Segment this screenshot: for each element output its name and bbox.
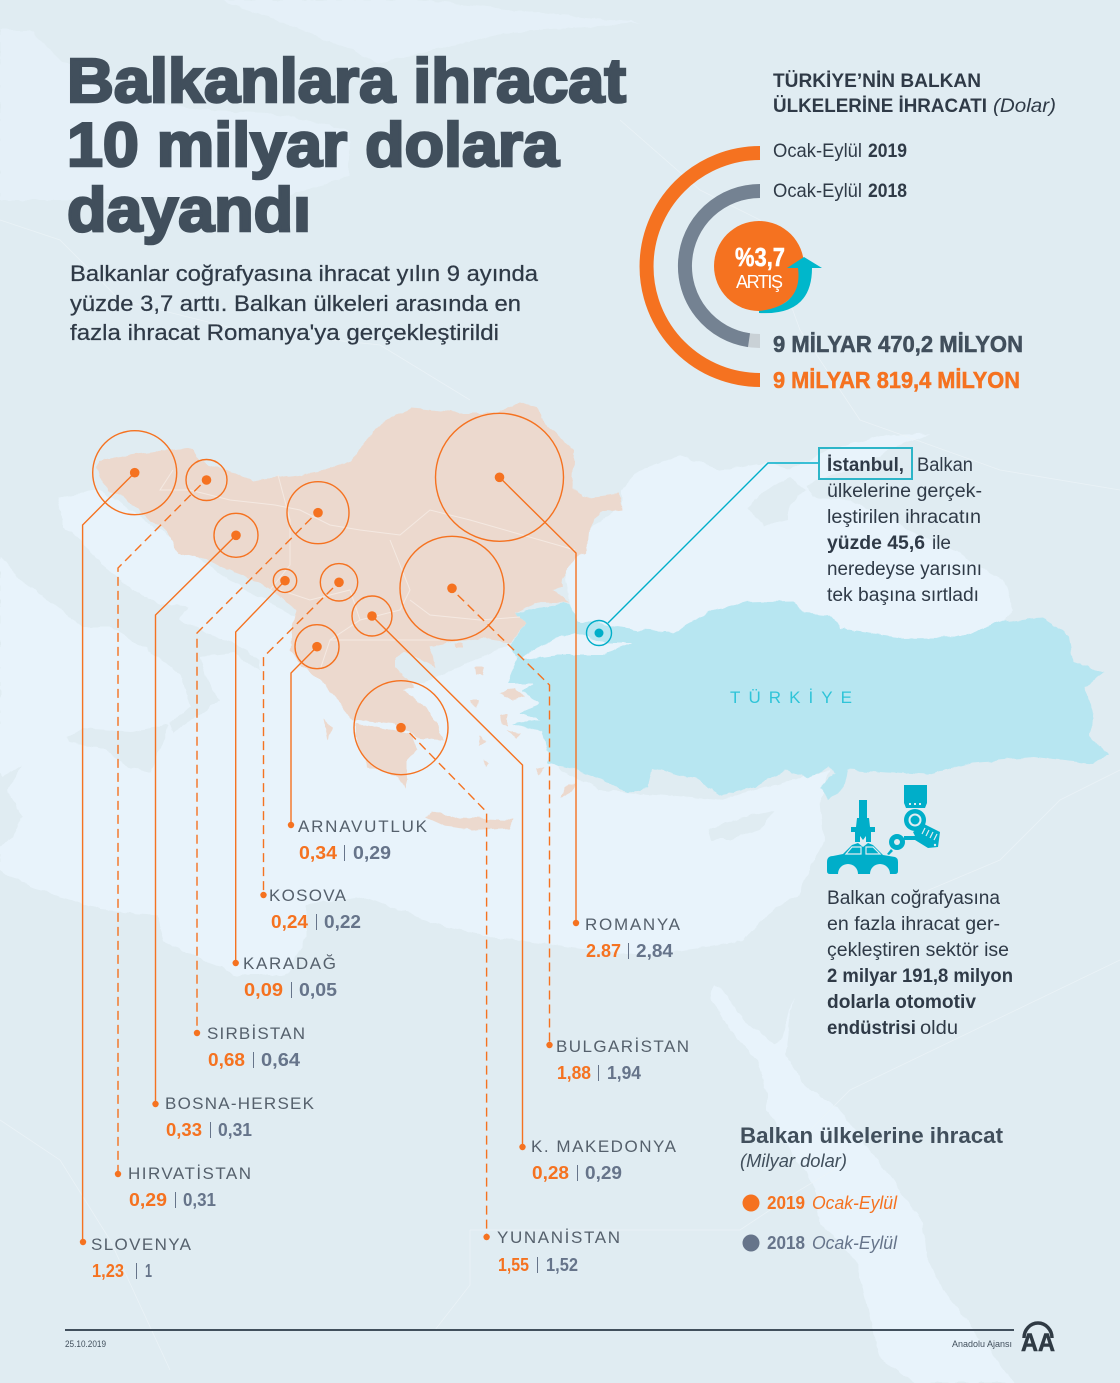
country: Romanya: ROMANYA	[585, 915, 681, 934]
badge: 3.7 percent increase: ARTIŞ	[736, 272, 783, 292]
country: Sırbistan: 0,68	[208, 1050, 245, 1070]
title: Balkanlara ihracat	[67, 47, 626, 116]
legend	[740, 1123, 1004, 1253]
text: automotive sector	[827, 888, 1013, 1039]
callout text: ile	[932, 533, 951, 554]
callout text: İstanbul,	[827, 455, 904, 476]
country: Arnavutluk: 0,29	[353, 843, 391, 863]
intro text: Balkanlar coğrafyasına ihracat yılın 9 ayında	[70, 261, 539, 286]
country: Karadağ: 0,09	[244, 980, 283, 1000]
country: Karadağ: KARADAĞ	[243, 954, 336, 973]
country: Yunanistan	[354, 681, 620, 1275]
country: Kuzey Makedonya	[352, 596, 677, 1183]
country: Romanya: 2.87	[586, 941, 621, 961]
callout text: neredeyse yarısını	[827, 559, 982, 580]
value: 2019 total: 9 MİLYAR 819,4 MİLYON	[773, 367, 1020, 393]
callout text	[827, 455, 982, 606]
country: Slovenya: SLOVENYA	[91, 1235, 192, 1254]
badge: 3.7 percent increase	[714, 221, 804, 311]
label: 2018 period	[773, 181, 907, 202]
callout text: tek başına sırtladı	[827, 585, 979, 606]
value: 2018 total: 9 MİLYAR 470,2 MİLYON	[773, 331, 1023, 357]
legend item: 2019: 2019	[767, 1193, 805, 1213]
country: Yunanistan: 1,55	[498, 1255, 529, 1275]
title: dayandı	[67, 176, 311, 245]
country: Kosova: 0,22	[324, 912, 361, 932]
title: 10 milyar dolara	[67, 111, 560, 180]
country: Kosova	[260, 564, 361, 932]
leader line	[608, 463, 819, 623]
country: Slovenya	[80, 431, 192, 1281]
country: Arnavutluk: ARNAVUTLUK	[298, 817, 428, 836]
country: Yunanistan: YUNANİSTAN	[497, 1228, 620, 1247]
map: Türkiye	[507, 602, 1109, 800]
intro text: yüzde 3,7 arttı. Balkan ülkeleri arasında en	[70, 291, 521, 316]
country: Hırvatistan: 0,31	[183, 1190, 216, 1210]
text: automotive sector: endüstrisi	[827, 1018, 916, 1039]
text: automotive sector: 2 milyar 191,8 milyon	[827, 966, 1013, 987]
highlight box	[819, 448, 912, 479]
text: automotive sector: çekleştiren sektör ise	[827, 940, 1009, 961]
callout text: yüzde 45,6	[827, 533, 925, 554]
country: Romanya	[436, 413, 681, 961]
date: 25.10.2019	[65, 1339, 106, 1350]
panel: Türkiye export arcs	[647, 71, 1056, 393]
İstanbul marker	[586, 620, 612, 646]
intro text: fazla ihracat Romanya'ya gerçekleştirildi	[70, 320, 499, 345]
legend item: 2019	[742, 1193, 898, 1213]
country: Hırvatistan: 0,29	[129, 1190, 167, 1210]
country: Hırvatistan: HIRVATİSTAN	[128, 1164, 251, 1183]
callout text: Balkan	[917, 455, 973, 476]
panel heading: ÜLKELERİNE İHRACATI	[773, 96, 987, 117]
country: Kosova: 0,24	[271, 912, 308, 932]
country: Romanya: 2,84	[636, 941, 673, 961]
source: Anadolu Ajansı	[952, 1339, 1012, 1350]
country: Kuzey Makedonya: 0,28	[532, 1163, 569, 1183]
country: Bosna-Hersek: 0,31	[218, 1120, 252, 1140]
footer	[65, 1323, 1055, 1357]
legend unit: (Milyar dolar)	[740, 1151, 847, 1171]
panel heading: (Dolar)	[993, 96, 1056, 117]
legend item: 2018: Ocak-Eylül	[812, 1233, 898, 1253]
callout: İstanbul	[586, 448, 982, 646]
legend item: 2018: 2018	[767, 1233, 805, 1253]
panel heading: TÜRKİYE’NİN BALKAN	[773, 71, 981, 92]
country: Bosna-Hersek	[152, 513, 315, 1140]
country: Sırbistan: 0,64	[261, 1050, 300, 1070]
country: Slovenya: 1	[145, 1261, 152, 1281]
country: Bosna-Hersek: 0,33	[166, 1120, 202, 1140]
legend item: 2018	[742, 1233, 898, 1253]
legend title: Balkan ülkelerine ihracat	[740, 1123, 1004, 1148]
callout text: leştirilen ihracatın	[827, 507, 981, 528]
country: Kosova: KOSOVA	[269, 886, 347, 905]
legend item: 2019: Ocak-Eylül	[812, 1193, 898, 1213]
country: Kuzey Makedonya: K. MAKEDONYA	[531, 1137, 677, 1156]
arc: 2018	[685, 191, 760, 341]
intro text	[70, 261, 539, 345]
label: 2018 period: 2018	[868, 181, 907, 202]
country: Karadağ: 0,05	[299, 980, 337, 1000]
map: Balkan countries	[97, 403, 622, 830]
country: Bulgaristan	[400, 536, 689, 1083]
text: automotive sector: Balkan coğrafyasına	[827, 888, 1000, 909]
text: automotive sector: oldu	[920, 1018, 958, 1039]
panel heading	[773, 71, 1056, 117]
text: automotive sector: dolarla otomotiv	[827, 992, 976, 1013]
country: Kuzey Makedonya: 0,29	[585, 1163, 622, 1183]
country: Karadağ	[232, 569, 337, 1000]
icon: car factory robot	[827, 785, 940, 874]
country: Arnavutluk	[288, 625, 428, 863]
country: Yunanistan: 1,52	[546, 1255, 578, 1275]
country: Bulgaristan: 1,94	[607, 1063, 641, 1083]
label: 2019 period: Ocak-Eylül	[773, 141, 862, 162]
badge: 3.7 percent increase: %3,7	[735, 242, 785, 272]
title	[67, 47, 626, 245]
label: 2019 period	[773, 141, 907, 162]
country: Slovenya: 1,23	[92, 1261, 124, 1281]
country: Bulgaristan: 1,88	[557, 1063, 591, 1083]
logo: AA: AA	[1021, 1329, 1055, 1357]
country: Bosna-Hersek: BOSNA-HERSEK	[165, 1094, 315, 1113]
country: Bulgaristan: BULGARİSTAN	[556, 1037, 689, 1056]
label: 2018 period: Ocak-Eylül	[773, 181, 862, 202]
text: automotive sector: en fazla ihracat ger-	[827, 914, 1000, 935]
country: Sırbistan	[194, 482, 349, 1070]
arc: 2019	[647, 153, 760, 380]
callout text: ülkelerine gerçek-	[827, 481, 982, 502]
country: Arnavutluk: 0,34	[299, 843, 337, 863]
label: 2019 period: 2019	[868, 141, 907, 162]
Türkiye label: TÜRKİYE	[730, 688, 852, 707]
arrow: increase	[759, 257, 822, 313]
country: Sırbistan: SIRBİSTAN	[207, 1024, 305, 1043]
country: Hırvatistan	[115, 460, 251, 1210]
